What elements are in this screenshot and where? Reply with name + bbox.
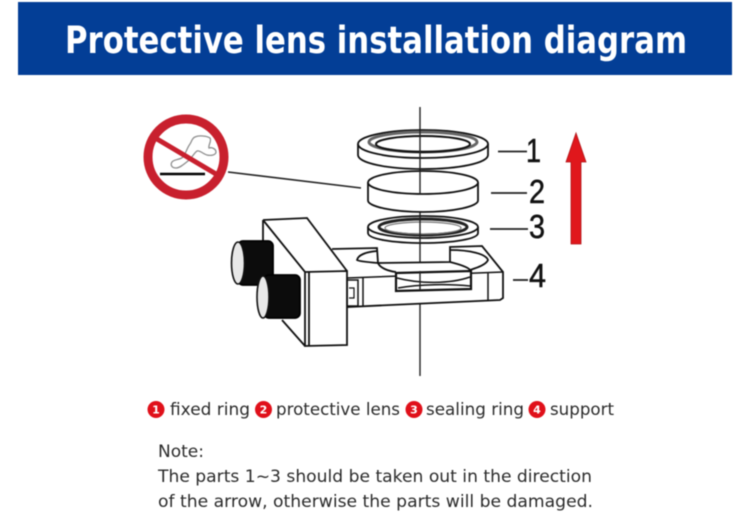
arm window [396, 271, 471, 291]
note text: of the arrow, otherwise the parts will be damaged. [158, 492, 593, 511]
red arrow: removal direction [566, 133, 586, 244]
legend item: fixed ring: fixed ring [170, 400, 250, 419]
part number callouts: 1 [526, 132, 541, 169]
block [263, 218, 347, 346]
part number callouts: 2 [529, 173, 545, 210]
title banner: Protective lens installation diagram [65, 19, 687, 62]
warning: do not touch the lens [148, 119, 224, 195]
legend item: support: support [550, 400, 615, 419]
legend item: support: 4 [533, 404, 541, 416]
center axis line [419, 107, 421, 376]
legend [148, 400, 615, 419]
part 4: support bracket [232, 218, 503, 346]
exploded diagram [148, 107, 546, 376]
legend item: protective lens: 2 [260, 404, 267, 416]
knob 1 [232, 241, 273, 285]
note text: Note: [158, 442, 204, 461]
legend item: protective lens: protective lens [276, 400, 400, 419]
part 3: sealing ring [368, 216, 478, 243]
legend item: sealing ring: sealing ring [426, 400, 524, 419]
legend item: sealing ring: 3 [410, 404, 418, 416]
part number callouts [490, 132, 546, 294]
knob 2 [257, 275, 300, 318]
leader line to lens [228, 172, 361, 188]
note text [157, 442, 593, 511]
support arm [332, 246, 503, 307]
title banner [18, 2, 732, 75]
part 1: fixed ring [358, 130, 488, 169]
part number callouts: 3 [529, 208, 545, 245]
part number callouts: 4 [529, 257, 546, 294]
legend item: fixed ring: 1 [152, 404, 160, 416]
part 2: protective lens [368, 171, 478, 212]
note text: The parts 1~3 should be taken out in the direction [157, 467, 592, 486]
